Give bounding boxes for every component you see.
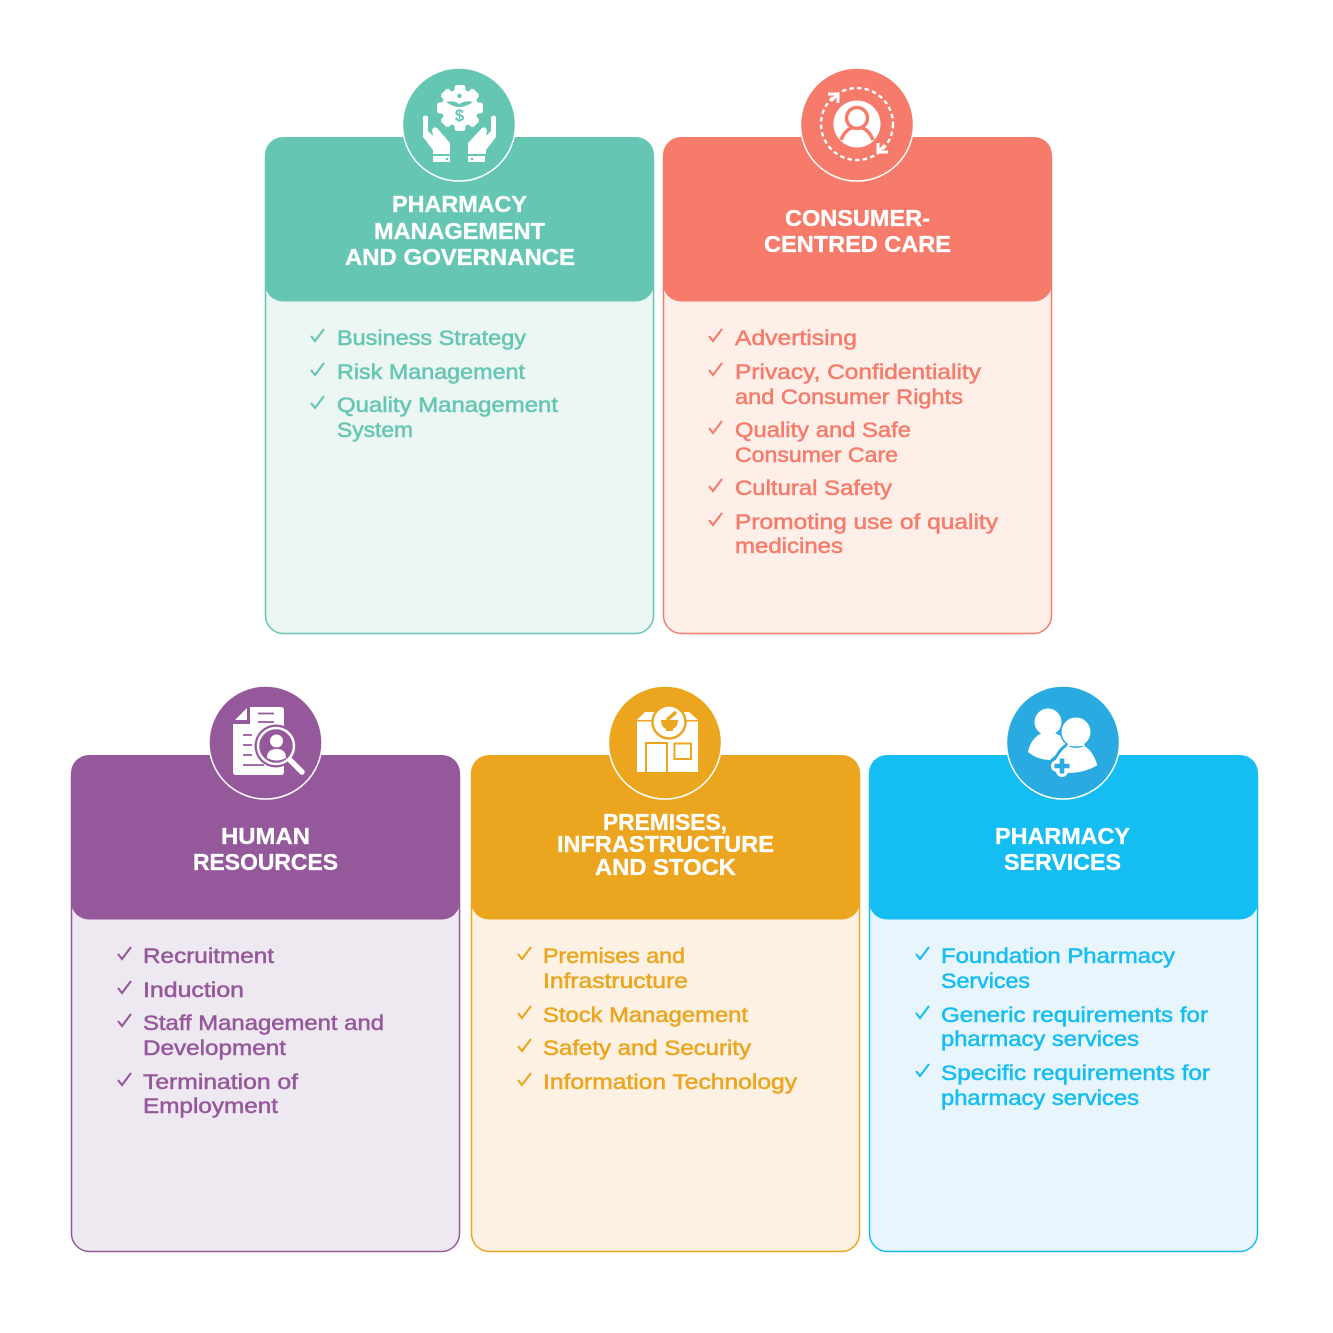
heading: PHARMACY xyxy=(995,823,1130,849)
item: cultural safety: Cultural Safety xyxy=(735,477,893,500)
checklist xyxy=(118,945,384,1118)
item: generic requirements: Generic requirements for xyxy=(941,1004,1208,1027)
item: promoting quality medicines: Promoting use of quality xyxy=(735,511,999,534)
item: specific requirements xyxy=(916,1062,1210,1110)
item: termination xyxy=(118,1071,298,1118)
card header xyxy=(869,755,1258,920)
panel: pharmacy services xyxy=(869,685,1258,1252)
item: quality and safe care: Consumer Care xyxy=(735,444,898,467)
item: quality and safe care xyxy=(709,419,911,467)
card body xyxy=(266,140,654,634)
item: induction xyxy=(118,979,244,1002)
item: specific requirements: Specific requirements for xyxy=(941,1062,1210,1085)
item: foundation pharmacy services: Foundation Pharmacy xyxy=(941,945,1176,968)
item: termination: Termination of xyxy=(143,1071,298,1094)
heading: PREMISES, xyxy=(603,809,727,835)
checklist xyxy=(518,945,798,1094)
item: premises and infrastructure xyxy=(518,945,688,993)
item: quality management system xyxy=(311,394,558,442)
card header xyxy=(471,755,860,920)
icon: person in cycle xyxy=(800,67,914,182)
item: privacy: Privacy, Confidentiality xyxy=(735,361,982,384)
card body xyxy=(472,758,860,1252)
card header xyxy=(71,755,460,920)
item: staff management: Staff Management and xyxy=(143,1012,384,1035)
panel: pharmacy management and governance xyxy=(265,67,654,633)
panel: human resources xyxy=(71,685,460,1252)
item: promoting quality medicines xyxy=(709,511,999,558)
icon: hands holding gear: $ xyxy=(455,106,465,125)
heading: AND STOCK xyxy=(595,854,736,880)
card body xyxy=(72,758,460,1252)
checklist xyxy=(709,327,999,558)
item: business strategy: Business Strategy xyxy=(337,327,527,350)
heading: RESOURCES xyxy=(193,849,338,875)
checklist xyxy=(916,945,1210,1110)
item: privacy xyxy=(709,361,982,409)
item: termination: Employment xyxy=(143,1095,278,1118)
card body xyxy=(870,758,1258,1252)
card header xyxy=(265,137,654,302)
item: advertising: Advertising xyxy=(735,327,857,350)
item: quality and safe care: Quality and Safe xyxy=(735,419,911,442)
heading: CENTRED CARE xyxy=(764,231,951,257)
card body xyxy=(664,140,1052,634)
item: recruitment: Recruitment xyxy=(143,945,274,968)
heading xyxy=(764,205,951,257)
heading xyxy=(557,809,774,880)
item: stock management: Stock Management xyxy=(543,1004,748,1027)
heading: PHARMACY xyxy=(392,191,527,217)
item: generic requirements: pharmacy services xyxy=(941,1028,1139,1051)
item: premises and infrastructure: Infrastructure xyxy=(543,970,688,993)
panel: premises, infrastructure and stock xyxy=(471,685,860,1252)
item: information technology: Information Technology xyxy=(543,1071,798,1094)
heading: SERVICES xyxy=(1004,849,1121,875)
item: staff management: Development xyxy=(143,1037,286,1060)
item: safety and security: Safety and Security xyxy=(543,1037,752,1060)
item: foundation pharmacy services: Services xyxy=(941,970,1030,993)
item: specific requirements: pharmacy services xyxy=(941,1087,1139,1110)
heading: CONSUMER- xyxy=(785,205,930,231)
item: promoting quality medicines: medicines xyxy=(735,535,843,558)
item: quality management system: Quality Management xyxy=(337,394,558,417)
heading xyxy=(193,823,338,875)
item: generic requirements xyxy=(916,1004,1208,1051)
heading xyxy=(345,191,575,270)
item: foundation pharmacy services xyxy=(916,945,1176,993)
item: privacy: and Consumer Rights xyxy=(735,386,963,409)
item: risk management: Risk Management xyxy=(337,361,525,384)
heading: AND GOVERNANCE xyxy=(345,244,575,270)
icon: pharmacy building xyxy=(608,685,722,800)
icon: two people with plus xyxy=(1006,685,1120,800)
heading xyxy=(995,823,1130,875)
heading: INFRASTRUCTURE xyxy=(557,831,774,857)
checklist xyxy=(311,327,558,442)
item: staff management xyxy=(118,1012,384,1060)
item: induction: Induction xyxy=(143,979,244,1002)
heading: HUMAN xyxy=(221,823,310,849)
item: premises and infrastructure: Premises and xyxy=(543,945,685,968)
icon: hands holding gear xyxy=(402,67,516,182)
item: quality management system: System xyxy=(337,419,413,442)
panel: consumer-centred care xyxy=(663,67,1052,633)
heading: MANAGEMENT xyxy=(374,218,545,244)
card header xyxy=(663,137,1052,302)
icon: document with magnifier xyxy=(208,685,323,800)
